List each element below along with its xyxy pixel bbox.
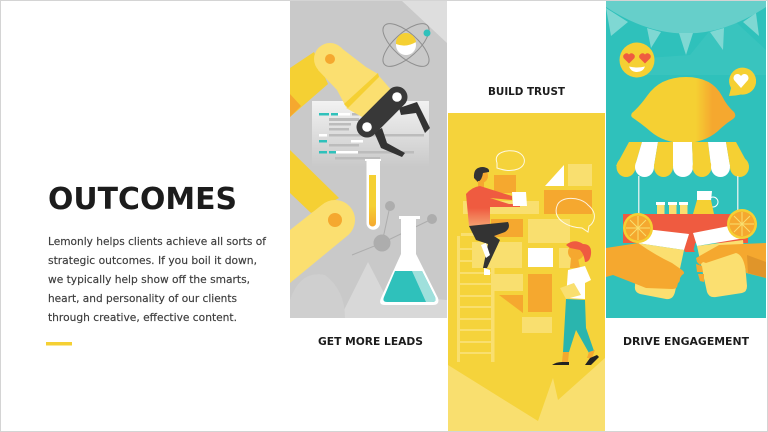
- flask: [380, 216, 438, 305]
- molecule: [352, 202, 436, 255]
- body text: we typically help show off the smarts,: [48, 274, 250, 286]
- small glasses: [656, 202, 688, 214]
- robot arm upper: [290, 43, 393, 118]
- stand poles and table: [623, 176, 748, 252]
- label: build trust: BUILD TRUST: [488, 86, 566, 98]
- body text: [48, 236, 266, 324]
- body text: heart, and personality of our clients: [48, 293, 237, 305]
- label: drive engagement: DRIVE ENGAGEMENT: [623, 336, 750, 348]
- banner with flags: [606, 1, 766, 55]
- robot arm lower: [290, 150, 355, 283]
- body text: through creative, effective content.: [48, 312, 237, 324]
- panel: build trust: [448, 113, 605, 431]
- lemon: [631, 77, 735, 143]
- robot claw: [362, 92, 430, 157]
- body text: strategic outcomes. If you boil it down,: [48, 255, 257, 267]
- blocks: [463, 164, 592, 333]
- panel: get more leads: [290, 1, 447, 318]
- speech bubbles: [496, 151, 594, 232]
- icon: heart-eyes emoji: [620, 42, 654, 78]
- awning: [616, 142, 749, 177]
- ladder: [457, 233, 494, 362]
- icon: atom: [376, 17, 436, 73]
- pitcher: [693, 191, 718, 214]
- test tube: [365, 159, 381, 230]
- accent bar: [46, 342, 72, 346]
- woman: [552, 241, 599, 365]
- label: get more leads: GET MORE LEADS: [318, 336, 423, 348]
- orange slice left: [623, 213, 653, 243]
- body text: Lemonly helps clients achieve all sorts of: [48, 236, 266, 248]
- man: [466, 167, 527, 275]
- title: OUTCOMES: [48, 182, 237, 217]
- left glass and hand: [606, 228, 689, 299]
- orange slice right: [727, 209, 757, 239]
- panel: drive engagement: [606, 1, 766, 318]
- right glass and hand: [693, 226, 766, 297]
- screen with code lines: [312, 101, 429, 167]
- icon: heart bubble: [729, 68, 756, 96]
